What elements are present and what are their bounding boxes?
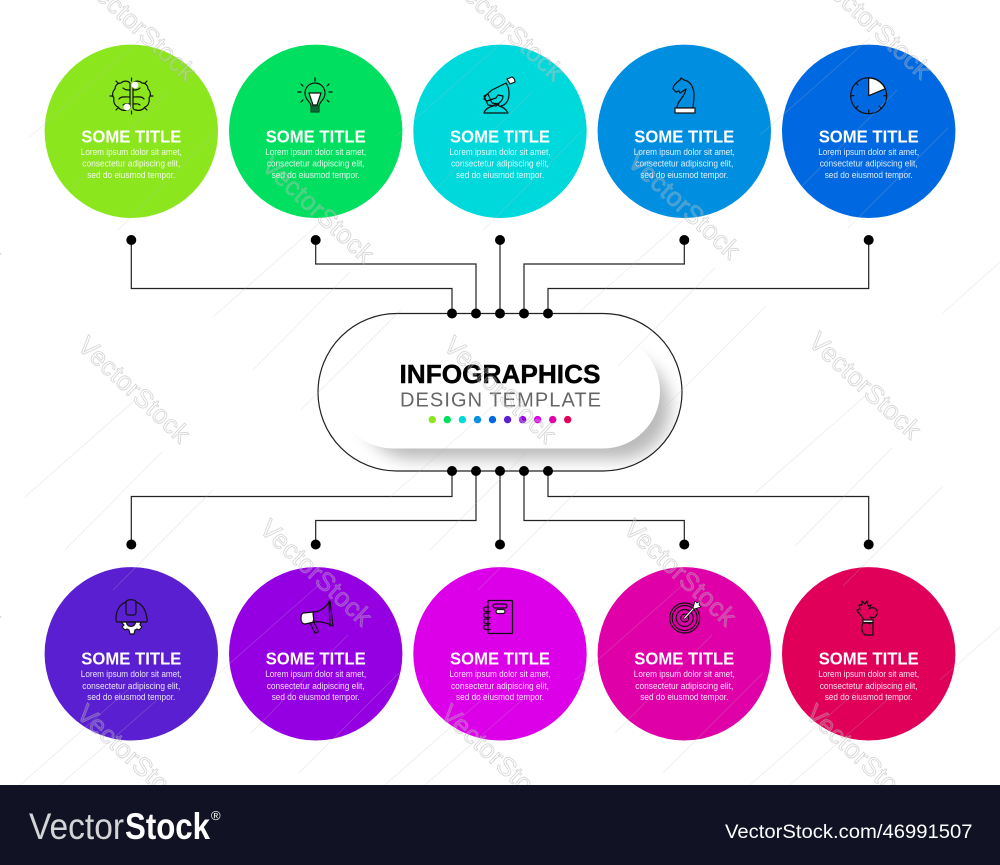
footer logo: Vector bbox=[29, 806, 124, 847]
icon: chess knight bbox=[673, 78, 695, 113]
title: SOME TITLE bbox=[81, 126, 181, 146]
body text bbox=[634, 147, 735, 180]
panel: circle 2 light bulb bbox=[229, 45, 402, 218]
body text: consectetur adipiscing elit, bbox=[451, 159, 549, 169]
body text: consectetur adipiscing elit, bbox=[820, 681, 918, 691]
watermark overlay: VectorStock bbox=[72, 330, 197, 449]
watermark overlay: VectorStock bbox=[71, 698, 196, 817]
connector dots bbox=[126, 235, 874, 550]
footer image id: VectorStock.com/46991507 bbox=[725, 822, 972, 843]
body text bbox=[81, 669, 182, 702]
title: SOME TITLE bbox=[634, 126, 734, 146]
body text: Lorem ipsum dolor sit amet, bbox=[265, 147, 366, 157]
body text: Lorem ipsum dolor sit amet, bbox=[265, 669, 366, 679]
body text bbox=[818, 147, 919, 180]
body text: sed do eiusmod tempor. bbox=[456, 170, 544, 180]
title: SOME TITLE bbox=[266, 648, 366, 668]
body text: sed do eiusmod tempor. bbox=[87, 692, 175, 702]
title: SOME TITLE bbox=[634, 648, 734, 668]
body text: Lorem ipsum dolor sit amet, bbox=[450, 669, 550, 679]
body text: Lorem ipsum dolor sit amet, bbox=[634, 669, 735, 679]
body text: consectetur adipiscing elit, bbox=[451, 681, 549, 691]
title: SOME TITLE bbox=[266, 126, 366, 146]
title: SOME TITLE bbox=[450, 648, 550, 668]
panel: circle 1 brain bbox=[45, 45, 218, 218]
body text: consectetur adipiscing elit, bbox=[267, 159, 365, 169]
body text: Lorem ipsum dolor sit amet, bbox=[818, 669, 919, 679]
body text: sed do eiusmod tempor. bbox=[87, 170, 175, 180]
body text: Lorem ipsum dolor sit amet, bbox=[634, 147, 735, 157]
panel: circle 9 target bbox=[598, 567, 771, 740]
body text: Lorem ipsum dolor sit amet, bbox=[81, 669, 182, 679]
footer logo bbox=[29, 806, 210, 847]
icon: pie clock bbox=[851, 78, 887, 114]
panel: circle 3 microscope bbox=[413, 45, 587, 218]
body text: consectetur adipiscing elit, bbox=[820, 159, 918, 169]
body text: Lorem ipsum dolor sit amet, bbox=[450, 147, 550, 157]
icon: target bbox=[670, 601, 701, 633]
body text bbox=[450, 147, 550, 180]
central panel bbox=[318, 314, 682, 471]
body text bbox=[634, 669, 735, 702]
panel: circle 10 ok hand bbox=[782, 567, 955, 740]
icon: notebook bbox=[484, 600, 512, 634]
watermark overlay: VectorStock bbox=[622, 146, 747, 265]
body text: sed do eiusmod tempor. bbox=[640, 170, 728, 180]
colour dots row bbox=[429, 416, 571, 423]
watermark overlay: VectorStock bbox=[618, 513, 743, 632]
body text bbox=[81, 147, 182, 180]
body text: consectetur adipiscing elit, bbox=[267, 681, 365, 691]
body text bbox=[265, 147, 366, 180]
body text: consectetur adipiscing elit, bbox=[635, 159, 733, 169]
body text: sed do eiusmod tempor. bbox=[825, 692, 913, 702]
watermark overlay: VectorStock bbox=[438, 330, 563, 449]
body text bbox=[265, 669, 366, 702]
body text: consectetur adipiscing elit, bbox=[82, 159, 180, 169]
subheading: design template: DESIGN TEMPLATE bbox=[400, 390, 601, 412]
body text: consectetur adipiscing elit, bbox=[635, 681, 733, 691]
body text: sed do eiusmod tempor. bbox=[456, 692, 544, 702]
panel: circle 6 helmet bbox=[45, 567, 218, 740]
title: SOME TITLE bbox=[819, 648, 919, 668]
title: SOME TITLE bbox=[819, 126, 919, 146]
body text: sed do eiusmod tempor. bbox=[272, 692, 360, 702]
watermark overlay: VectorStock bbox=[256, 150, 381, 269]
footer logo: Stock bbox=[125, 806, 210, 847]
body text: consectetur adipiscing elit, bbox=[82, 681, 180, 691]
panel: circle 8 notebook bbox=[413, 567, 587, 740]
body text bbox=[450, 669, 550, 702]
icon: megaphone bbox=[301, 601, 333, 633]
body text: sed do eiusmod tempor. bbox=[640, 692, 728, 702]
registered mark: ® bbox=[211, 808, 221, 823]
watermark overlay: VectorStock bbox=[254, 513, 379, 632]
watermark overlay: VectorStock bbox=[800, 698, 925, 817]
title: SOME TITLE bbox=[450, 126, 550, 146]
heading: infographics: INFOGRAPHICS bbox=[400, 359, 600, 389]
body text bbox=[818, 669, 919, 702]
body text: Lorem ipsum dolor sit amet, bbox=[818, 147, 919, 157]
body text: sed do eiusmod tempor. bbox=[825, 170, 913, 180]
body text: Lorem ipsum dolor sit amet, bbox=[81, 147, 182, 157]
footer bar bbox=[0, 785, 1000, 865]
title: SOME TITLE bbox=[81, 648, 181, 668]
body text: sed do eiusmod tempor. bbox=[272, 170, 360, 180]
icon: microscope bbox=[484, 77, 515, 113]
watermark overlay: VectorStock bbox=[435, 698, 560, 817]
panel: circle 4 chess knight bbox=[598, 45, 771, 218]
icon: light bulb bbox=[298, 78, 332, 112]
icon: brain bbox=[110, 78, 153, 114]
watermark overlay: VectorStock bbox=[803, 326, 928, 445]
connector lines bbox=[131, 240, 869, 544]
panel: circle 5 pie clock bbox=[782, 45, 955, 218]
icon: helmet and gear bbox=[116, 600, 147, 634]
icon: ok hand bbox=[857, 601, 877, 635]
panel: circle 7 megaphone bbox=[229, 567, 402, 740]
